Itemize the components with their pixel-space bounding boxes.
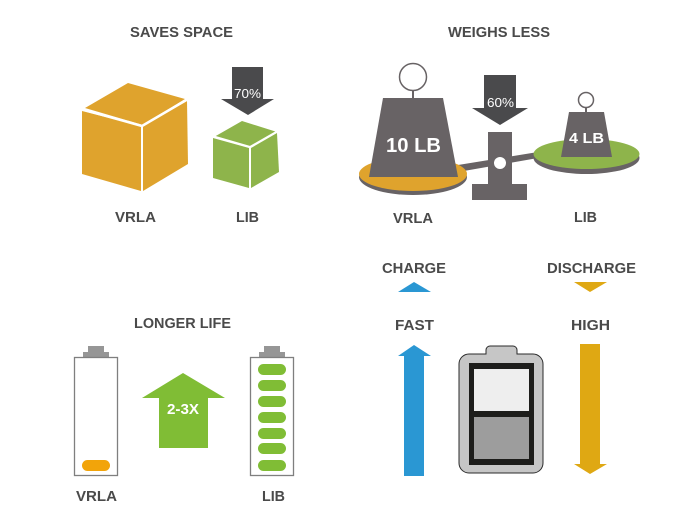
heading: charge: CHARGE xyxy=(382,261,446,277)
arrow: 70% reduction xyxy=(221,67,274,115)
heading: discharge: DISCHARGE xyxy=(547,261,636,277)
label: LIB: LIB xyxy=(262,489,285,505)
arrow: 2-3X xyxy=(142,373,225,448)
arrow: 60% reduction xyxy=(472,75,528,125)
panel: weighs less xyxy=(359,25,640,227)
arrow: high discharge xyxy=(574,344,607,474)
label: fast: FAST xyxy=(395,318,434,334)
panel: longer life xyxy=(74,316,294,505)
left pan xyxy=(359,157,467,195)
scale stand xyxy=(472,132,527,200)
weight: 4 LB xyxy=(561,92,612,157)
icon: battery xyxy=(459,346,543,473)
panel: saves space xyxy=(81,25,279,226)
weight: 4 LB: 4 LB xyxy=(569,130,604,147)
weight: 10 LB xyxy=(369,64,458,177)
icon: LIB cube xyxy=(212,121,279,189)
icon: VRLA battery xyxy=(74,346,118,476)
label: VRLA: VRLA xyxy=(393,211,434,227)
arrow: 60% reduction: 60% xyxy=(487,95,514,110)
right pan xyxy=(534,139,640,174)
heading: saves space: SAVES SPACE xyxy=(130,25,233,41)
label: LIB: LIB xyxy=(236,210,259,226)
heading: longer life: LONGER LIFE xyxy=(134,316,231,332)
weight: 10 LB: 10 LB xyxy=(386,134,441,157)
arrow: 2-3X: 2-3X xyxy=(167,402,199,418)
label: VRLA: VRLA xyxy=(76,489,118,505)
icon: LIB battery xyxy=(250,346,294,476)
arrow: fast charge xyxy=(398,345,431,476)
arrow: 70% reduction: 70% xyxy=(234,86,261,101)
icon: VRLA cube xyxy=(81,83,188,192)
scale beam xyxy=(458,152,538,172)
label: LIB: LIB xyxy=(574,210,597,226)
label: VRLA: VRLA xyxy=(115,210,157,226)
label: high: HIGH xyxy=(571,318,610,334)
panel: charge and discharge xyxy=(382,261,636,476)
icon: discharge triangle xyxy=(574,282,607,292)
icon: charge triangle xyxy=(398,282,431,292)
heading: weighs less: WEIGHS LESS xyxy=(448,25,550,41)
